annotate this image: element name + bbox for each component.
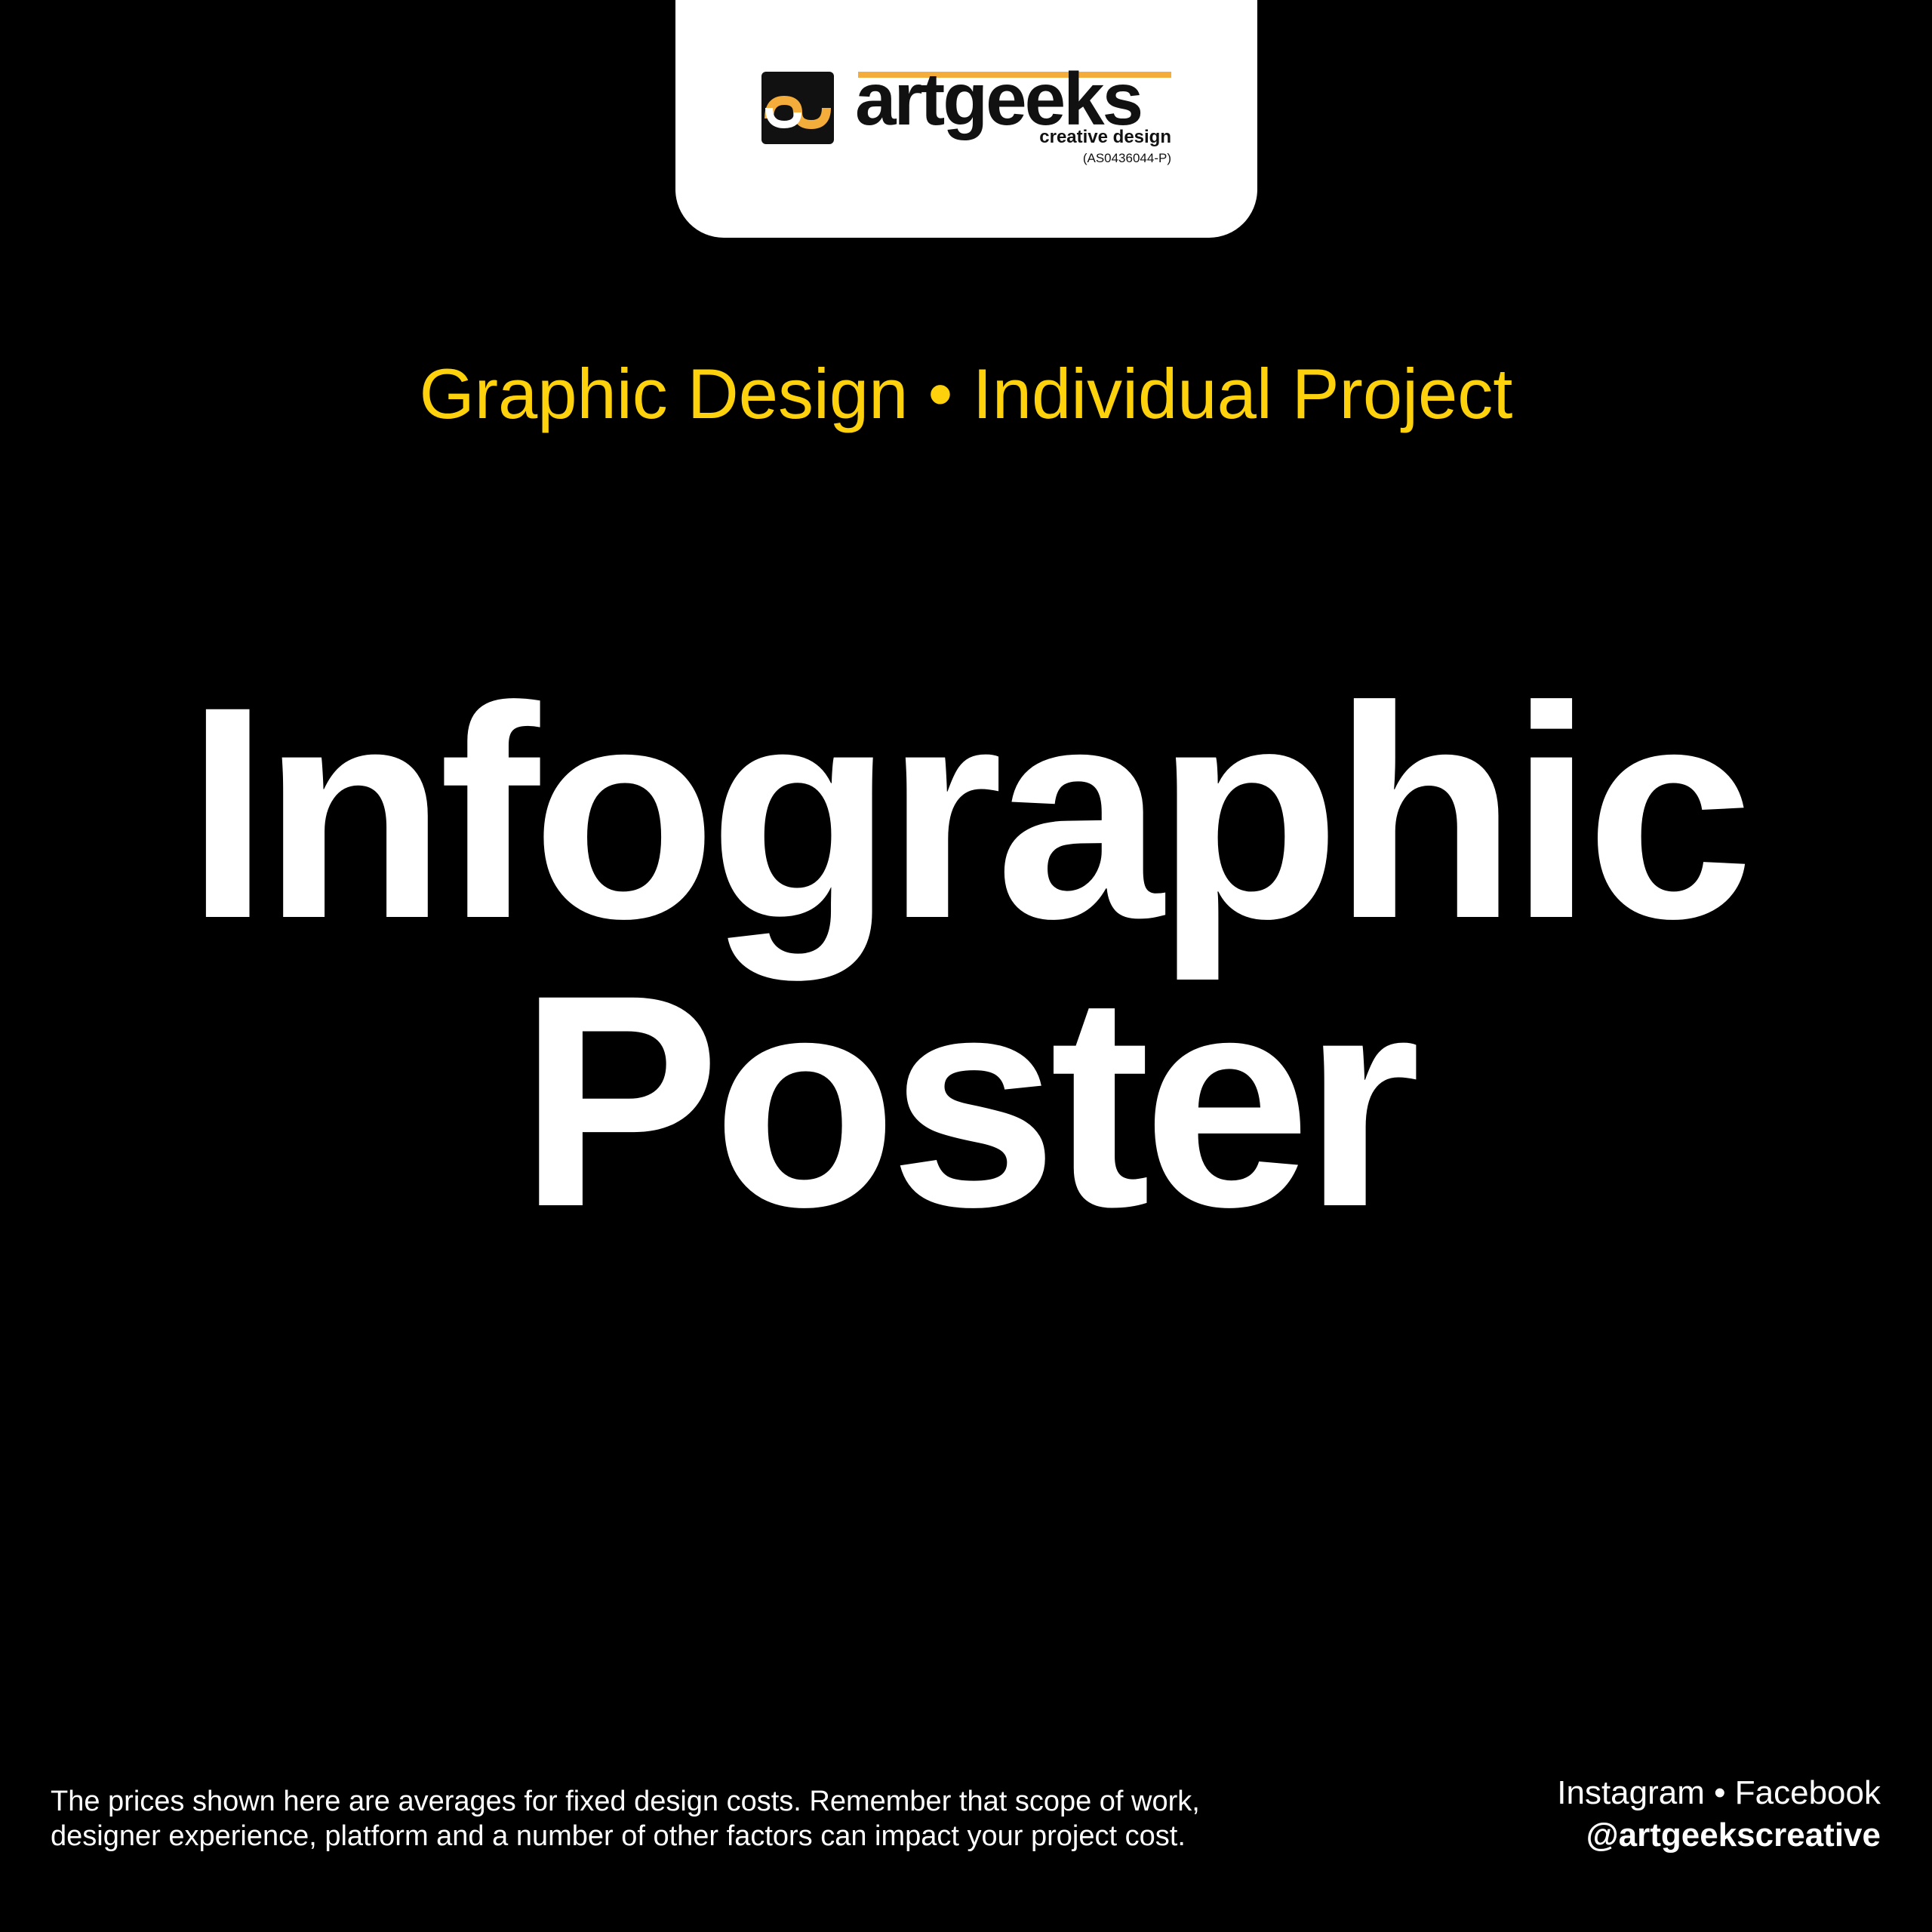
logo wordmark: artgeeks	[855, 57, 1141, 140]
footer disclaimer	[51, 1786, 1200, 1852]
title: Poster	[519, 932, 1413, 1269]
title: Infographic	[186, 644, 1746, 981]
social handles	[1557, 1774, 1881, 1854]
icon: logo mark	[761, 72, 834, 144]
logo registration: (AS0436044-P)	[1083, 151, 1171, 165]
title	[186, 644, 1746, 1269]
logo orange bar	[858, 72, 1171, 78]
subtitle: Graphic Design • Individual Project	[420, 354, 1512, 433]
footer disclaimer: The prices shown here are averages for fixed design costs. Remember that scope of work,	[51, 1786, 1200, 1817]
social handles: @artgeekscreative	[1586, 1817, 1881, 1854]
social handles: Instagram • Facebook	[1557, 1774, 1881, 1811]
footer disclaimer: designer experience, platform and a number of other factors can impact your project cost.	[51, 1820, 1186, 1852]
logo tagline: creative design	[1039, 127, 1171, 147]
logo panel	[675, 0, 1257, 238]
